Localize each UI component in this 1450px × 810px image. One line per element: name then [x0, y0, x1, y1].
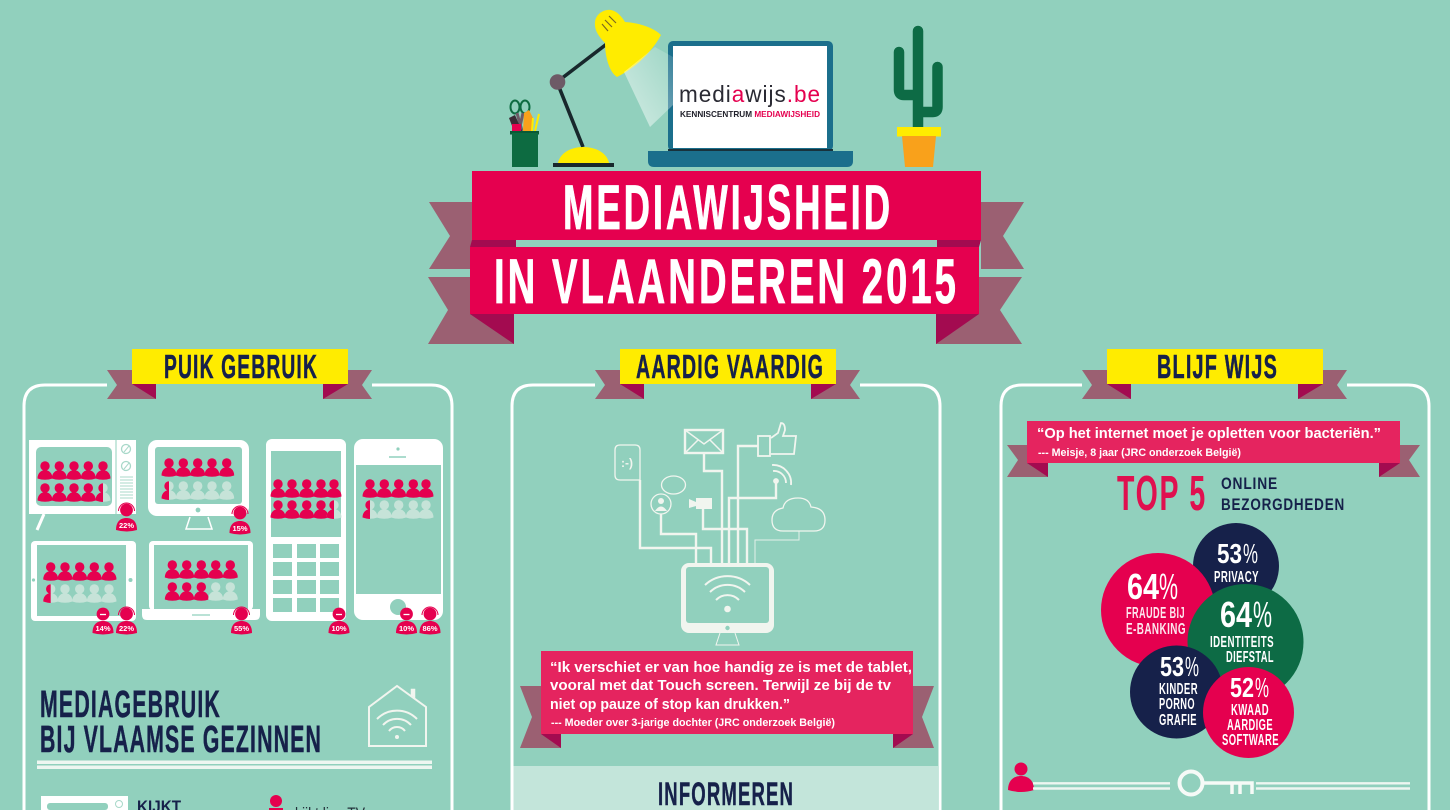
heading: top 5: BEZORGDHEDEN: [1221, 495, 1345, 514]
panel: blijf wijs: [1001, 348, 1429, 810]
logo subtitle: KENNISCENTRUM MEDIAWIJSHEID: [680, 109, 820, 119]
bubble: kwaadaardige software: SOFTWARE: [1222, 732, 1279, 749]
bubble: identiteitsdiefstal: 64: [1220, 594, 1252, 635]
heading: mediagebruik: BIJ VLAAMSE GEZINNEN: [40, 719, 322, 761]
quote: moeder: niet op pauze of stop kan drukken.”: [550, 696, 790, 713]
badge: 22% tv: 22%: [119, 521, 134, 530]
heading: top 5: ONLINE: [1221, 474, 1278, 493]
heading: top 5: TOP 5: [1117, 467, 1207, 521]
heading: mediagebruik: MEDIAGEBRUIK: [40, 684, 221, 726]
section heading: blijf wijs: BLIJF WIJS: [1157, 348, 1278, 385]
section heading: blijf wijs: [1082, 348, 1347, 399]
badge: 14% tablet: 14%: [95, 624, 111, 633]
badge: 15% desktop: 15%: [232, 524, 248, 533]
quote: moeder: “Ik verschiet er van hoe handig ze is met de tablet,: [550, 659, 912, 676]
device: desktop: [148, 440, 249, 529]
icon: cloud: [772, 498, 825, 531]
bubble: fraude: [1101, 553, 1215, 667]
bubble chart: online concerns: [1101, 523, 1304, 758]
badge: 10% smartphone: [396, 608, 417, 634]
bubble: identiteitsdiefstal: %: [1253, 594, 1272, 635]
device: tablet: [31, 541, 136, 621]
laptop with logo: [624, 41, 853, 167]
device: keypad phone: [266, 439, 346, 621]
section heading: aardig vaardig: AARDIG VAARDIG: [636, 348, 824, 385]
logo text: mediawijs.be: [679, 81, 821, 107]
quote: meisje: [1007, 421, 1420, 477]
bubble: identiteitsdiefstal: DIEFSTAL: [1226, 649, 1274, 666]
icon: smiley message: [615, 445, 640, 480]
icon: video camera: [689, 498, 712, 509]
quote: moeder: --- Moeder over 3-jarige dochter (JRC onderzoek België): [551, 717, 835, 729]
bubble: kinderpornografie: [1130, 646, 1223, 738]
badge: 55% laptop: [231, 607, 252, 634]
badge: 10% keypad phone: 10%: [331, 624, 347, 633]
network diagram: [615, 423, 825, 645]
pencil cup: [509, 100, 539, 167]
section heading: puik gebruik: [107, 348, 372, 399]
device: tv: [29, 440, 136, 530]
badge: 14% tablet: [92, 608, 114, 634]
bubble: kinderpornografie: GRAFIE: [1159, 712, 1197, 729]
icon: smiley message: :-): [621, 456, 633, 470]
quote: meisje: “Op het internet moet je opletten voor bacteriën.”: [1037, 425, 1381, 442]
bubble: kwaadaardige software: KWAAD: [1231, 702, 1269, 719]
section heading: puik gebruik: PUIK GEBRUIK: [164, 348, 318, 385]
badge: 55% laptop: 55%: [234, 624, 249, 633]
icon: thumbs up: [758, 423, 796, 456]
bubble: kinderpornografie: PORNO: [1159, 696, 1195, 713]
wires: [640, 446, 776, 563]
section heading: aardig vaardig: [595, 348, 860, 399]
cactus: [897, 31, 941, 167]
icon: person with speech bubble: [651, 476, 686, 514]
row: kijkt tv: [41, 795, 366, 810]
panel: puik gebruik: [24, 348, 452, 810]
bubble: kinderpornografie: 53: [1160, 651, 1184, 682]
bubble: fraude: E-BANKING: [1126, 621, 1186, 638]
title line 1: MEDIAWIJSHEID: [563, 173, 893, 243]
quote: meisje: --- Meisje, 8 jaar (JRC onderzoek België): [1038, 447, 1241, 459]
icon: antenna: [772, 465, 791, 485]
bubble: kinderpornografie: KINDER: [1159, 681, 1198, 698]
bubble: privacy: [1193, 523, 1279, 609]
quote: moeder: [520, 651, 934, 748]
bubble: kwaadaardige software: [1203, 667, 1294, 758]
bubble: privacy: %: [1243, 538, 1258, 569]
badge: 10% smartphone: 10%: [399, 624, 414, 633]
bubble: fraude: %: [1159, 566, 1178, 607]
icon: envelope: [685, 430, 723, 453]
icon: wifi monitor: [681, 563, 774, 645]
badge: 86% smartphone: [420, 607, 440, 634]
badge: 22% tablet: 22%: [119, 624, 134, 633]
bubble: kwaadaardige software: AARDIGE: [1227, 717, 1273, 734]
badge: 22% tablet: [116, 607, 137, 634]
bubble: fraude: FRAUDE BIJ: [1126, 605, 1185, 622]
title line 2: IN VLAANDEREN 2015: [494, 247, 959, 317]
title ribbon: [428, 171, 1024, 344]
bubble: kwaadaardige software: 52: [1230, 672, 1254, 703]
bubble: kwaadaardige software: %: [1255, 672, 1269, 703]
bubble: fraude: 64: [1127, 566, 1159, 607]
icon: person with key: [1008, 762, 1410, 794]
heading: top 5: [1117, 467, 1345, 521]
panel: aardig vaardig: [512, 348, 940, 810]
bubble: privacy: PRIVACY: [1214, 569, 1259, 586]
quote: moeder: vooral met dat Touch screen. Terwijl ze bij de tv: [550, 677, 892, 694]
bubble: identiteitsdiefstal: [1188, 584, 1304, 700]
bubble: identiteitsdiefstal: IDENTITEITS: [1210, 634, 1274, 651]
desk lamp: [550, 10, 661, 167]
device: smartphone: [354, 439, 443, 620]
badge: 15% desktop: [230, 506, 250, 534]
icon: wifi house: [369, 686, 426, 746]
badge: 86% smartphone: 86%: [422, 624, 438, 633]
informeren band: [513, 766, 938, 810]
bubble: privacy: 53: [1217, 538, 1242, 569]
badge: 22% tv: [116, 503, 137, 532]
badge: 10% keypad phone: [328, 608, 350, 634]
heading: mediagebruik: [40, 684, 322, 761]
device: laptop: [142, 541, 260, 620]
bubble: kinderpornografie: %: [1185, 651, 1199, 682]
